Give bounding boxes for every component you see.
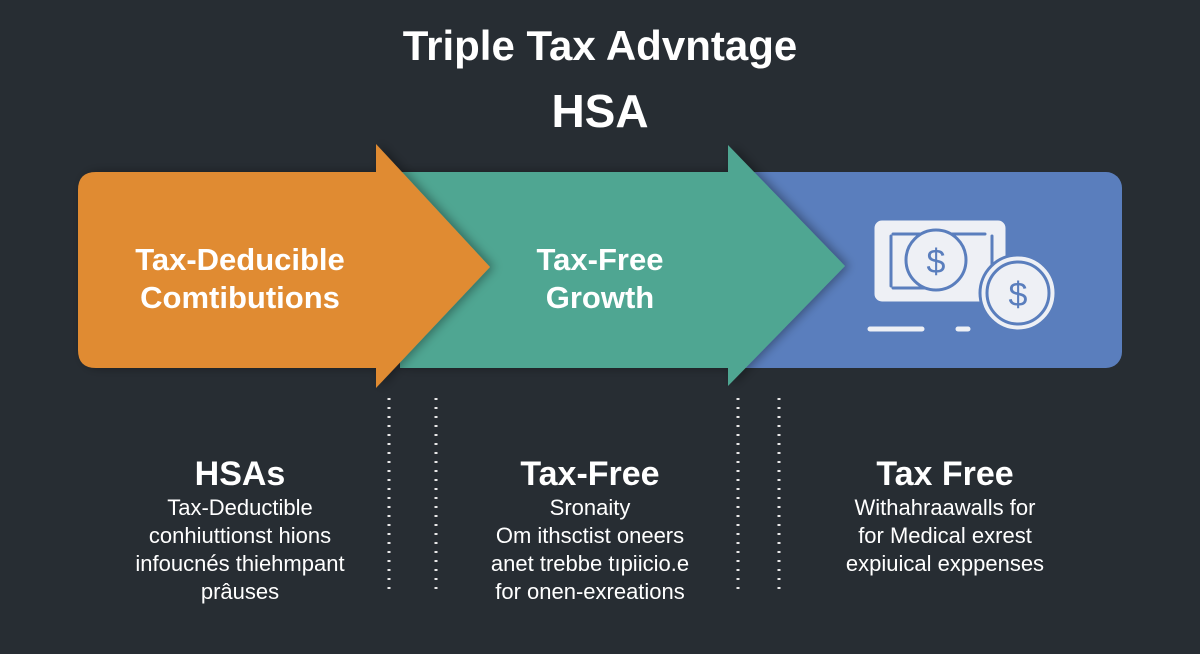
arrow label: growth — [536, 242, 663, 315]
column 2 text: Tax-Free — [520, 455, 660, 493]
subtitle HSA: HSA — [551, 85, 649, 137]
column 2 text — [491, 455, 689, 604]
arrow label: contributions: Comtibutions — [140, 280, 340, 315]
icon: money: $ — [927, 243, 946, 281]
column 3 text: Withahraawalls for — [855, 495, 1035, 520]
icon: money — [870, 223, 1056, 331]
column 2 text: Sronaity — [550, 495, 630, 520]
title: Triple Tax Advntage — [403, 22, 797, 69]
dotted connectors — [389, 398, 779, 595]
column 3 text: Tax Free — [876, 455, 1014, 493]
column 3 text: expiuical exppenses — [846, 551, 1044, 576]
column 2 text: anet trebbe tıpiicio.e — [491, 551, 689, 576]
arrow label: contributions — [135, 242, 345, 315]
arrow label: contributions: Tax-Deducible — [135, 242, 345, 277]
column 1 text: prâuses — [201, 579, 279, 604]
column 2 text: Om ithsctist oneers — [496, 523, 684, 548]
panel: blue withdrawals — [720, 172, 1122, 368]
arrow: teal growth — [400, 145, 845, 386]
column 1 text — [135, 455, 345, 604]
arrow: orange contributions — [78, 144, 490, 388]
arrow label: growth: Growth — [546, 280, 654, 315]
column 3 text: for Medical exrest — [858, 523, 1032, 548]
column 3 text — [846, 455, 1044, 576]
column 1 text: infoucnés thiehmpant — [135, 551, 345, 576]
column 1 text: Tax-Deductible — [167, 495, 313, 520]
icon: money: $ — [1009, 276, 1028, 314]
arrow label: growth: Tax-Free — [537, 242, 663, 277]
column 2 text: for onen-exreations — [495, 579, 685, 604]
column 1 text: HSAs — [195, 455, 285, 493]
column 1 text: conhiuttionst hions — [149, 523, 331, 548]
